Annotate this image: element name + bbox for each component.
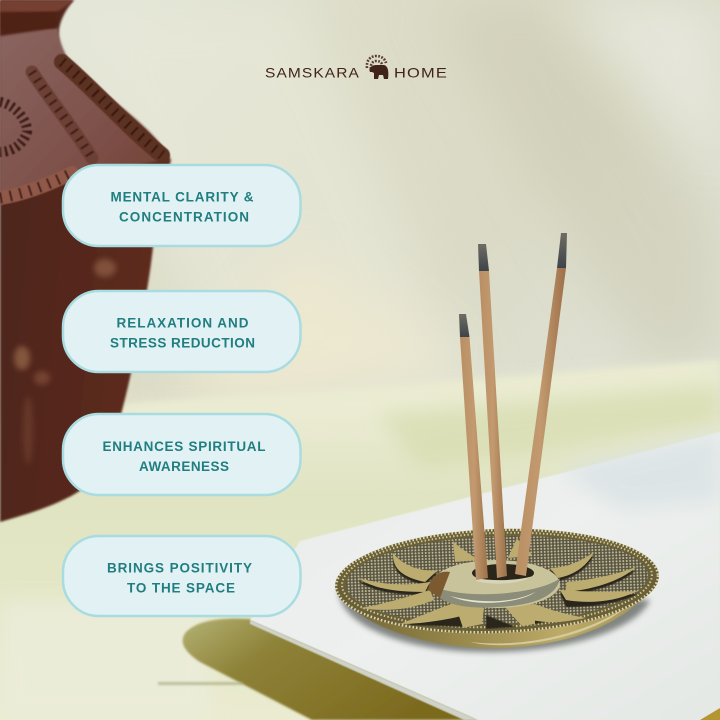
- incense stick right: [515, 233, 567, 576]
- pill 4 text: TO THE SPACE: [127, 580, 235, 596]
- pill 1 text: MENTAL CLARITY &: [110, 190, 254, 205]
- terracotta vase: [0, 0, 171, 522]
- incense stick left: [459, 314, 488, 580]
- pill 2 text: STRESS REDUCTION: [110, 336, 255, 351]
- sun ray shadows: [358, 555, 638, 629]
- pill 1 text: [110, 190, 254, 225]
- central raised dome: [432, 560, 560, 608]
- vase light patches: [94, 259, 116, 277]
- benefit pill 2: [63, 291, 300, 372]
- wall background: [0, 0, 720, 420]
- marble slab: [250, 432, 720, 720]
- brass sun incense holder: [333, 523, 661, 648]
- pill 4 text: BRINGS POSITIVITY: [107, 560, 252, 576]
- vase rope decorations: [0, 62, 162, 198]
- sun rays: [358, 538, 638, 628]
- icon: tree and elephant: [367, 56, 388, 79]
- benefit pill 1: [63, 165, 300, 246]
- pill 3 text: [102, 439, 266, 474]
- thin table shadow line: [158, 682, 243, 685]
- pill 4 text: [107, 560, 252, 596]
- logo wordmark left: SAMSKARA: [265, 64, 360, 80]
- benefit pill 4: [63, 536, 300, 616]
- logo wordmark right: HOME: [394, 64, 448, 80]
- dish rim: [333, 523, 661, 639]
- pill 1 text: CONCENTRATION: [119, 210, 249, 225]
- table surface: [0, 360, 720, 720]
- brand logo: [265, 56, 448, 80]
- pill 2 text: [110, 316, 255, 351]
- dish base: [336, 570, 657, 648]
- pill 2 text: RELAXATION AND: [116, 316, 249, 331]
- incense stick middle: [478, 244, 507, 578]
- pill 3 text: ENHANCES SPIRITUAL: [102, 439, 266, 454]
- table shadow beside slab: [183, 619, 478, 720]
- pill 3 text: AWARENESS: [139, 459, 229, 474]
- benefit pill 3: [63, 414, 300, 495]
